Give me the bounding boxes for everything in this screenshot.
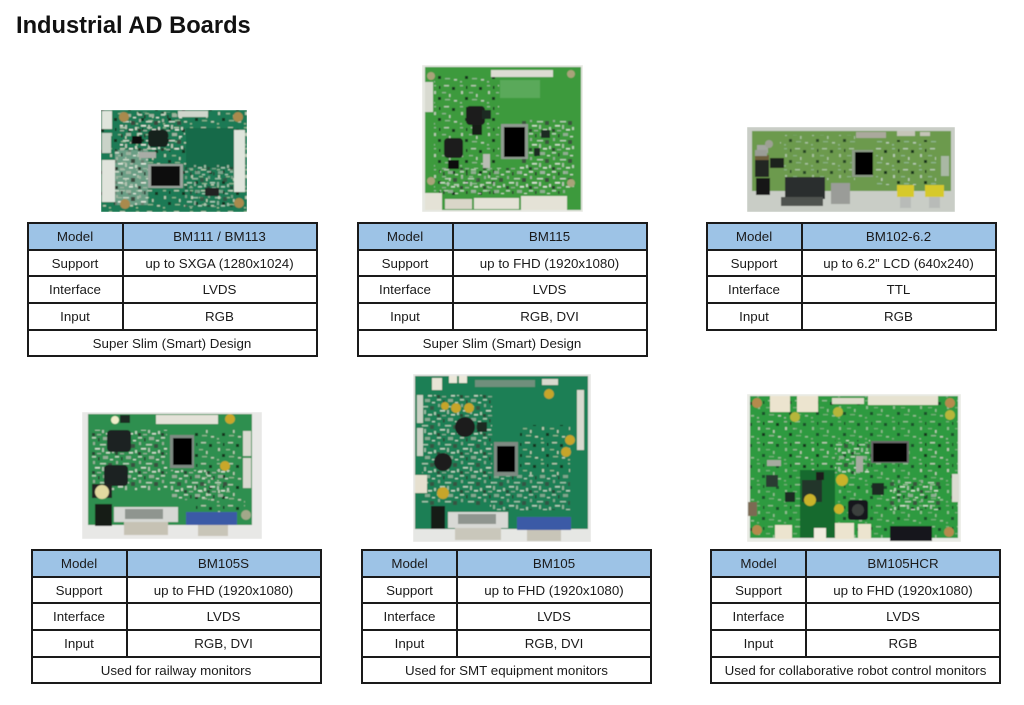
image: BM105S board: [82, 412, 262, 539]
table: BM115: Interface: [379, 282, 431, 297]
table: BM102-6.2: Interface: [728, 282, 780, 297]
table: BM105: Interface: [384, 609, 435, 624]
table: BM105HCR: [710, 549, 1001, 684]
table: BM115: LVDS: [533, 282, 566, 297]
table: BM111 / BM113: Super Slim (Smart) Design: [93, 336, 251, 351]
table: BM105S: BM105S: [198, 556, 249, 571]
table: BM105HCR: Input: [744, 636, 773, 651]
image: BM102-6.2 board: [747, 127, 955, 212]
image: BM105 board: [413, 374, 591, 542]
table: BM105S: Model: [61, 556, 97, 571]
table: BM102-6.2: Model: [736, 229, 772, 244]
table: BM115: Input: [390, 309, 420, 324]
title: Industrial AD Boards: [16, 13, 251, 39]
table: BM115: Model: [387, 229, 423, 244]
table: BM105: Input: [395, 636, 424, 651]
table: BM115: Support: [382, 256, 428, 271]
table: BM111 / BM113: Support: [52, 256, 98, 271]
table: BM111 / BM113: Input: [60, 309, 90, 324]
table: BM105HCR: BM105HCR: [867, 556, 939, 571]
table: BM111 / BM113: Interface: [49, 282, 101, 297]
table: BM115: [356, 222, 648, 357]
table: BM105: [361, 549, 652, 684]
table: BM105: Used for SMT equipment monitors: [405, 663, 608, 678]
table: BM115: up to FHD (1920x1080): [480, 256, 619, 271]
table: BM115: Super Slim (Smart) Design: [423, 336, 581, 351]
table: BM105: RGB, DVI: [525, 636, 583, 651]
table: BM105: up to FHD (1920x1080): [484, 583, 624, 598]
table: BM105HCR: RGB: [889, 636, 917, 651]
table: BM111 / BM113: [26, 222, 318, 357]
table: BM102-6.2: Input: [739, 309, 769, 324]
table: BM105S: Support: [56, 583, 102, 598]
image: BM111 / BM113 board: [101, 110, 247, 212]
table: BM111 / BM113: LVDS: [203, 282, 236, 297]
table: BM102-6.2: BM102-6.2: [866, 229, 931, 244]
table: BM102-6.2: Support: [731, 256, 777, 271]
table: BM105S: Used for railway monitors: [101, 663, 251, 678]
image: BM115 board: [422, 65, 583, 212]
table: BM105: Support: [386, 583, 433, 598]
table: BM102-6.2: RGB: [884, 309, 913, 324]
table: BM105: BM105: [533, 556, 575, 571]
table: BM111 / BM113: Model: [57, 229, 93, 244]
table: BM105S: RGB, DVI: [194, 636, 253, 651]
table: BM102-6.2: up to 6.2” LCD (640x240): [823, 256, 974, 271]
table: BM105HCR: Interface: [733, 609, 784, 624]
table: BM105: LVDS: [537, 609, 571, 624]
table: BM102-6.2: [706, 222, 996, 331]
table: BM105: Model: [391, 556, 428, 571]
table: BM111 / BM113: BM111 / BM113: [173, 229, 266, 244]
table: BM105HCR: LVDS: [886, 609, 920, 624]
table: BM105S: up to FHD (1920x1080): [154, 583, 293, 598]
table: BM105S: Input: [64, 636, 94, 651]
table: BM102-6.2: TTL: [887, 282, 910, 297]
table: BM105HCR: Support: [735, 583, 782, 598]
table: BM115: RGB, DVI: [520, 309, 579, 324]
table: BM105S: [30, 549, 322, 684]
table: BM111 / BM113: RGB: [205, 309, 234, 324]
table: BM105S: Interface: [53, 609, 105, 624]
table: BM105S: LVDS: [207, 609, 240, 624]
table: BM105HCR: Model: [740, 556, 777, 571]
table: BM105HCR: Used for collaborative robot control monitors: [725, 663, 986, 678]
image: BM105HCR board: [747, 394, 961, 542]
table: BM105HCR: up to FHD (1920x1080): [833, 583, 973, 598]
table: BM111 / BM113: up to SXGA (1280x1024): [145, 256, 294, 271]
table: BM115: BM115: [529, 229, 570, 244]
